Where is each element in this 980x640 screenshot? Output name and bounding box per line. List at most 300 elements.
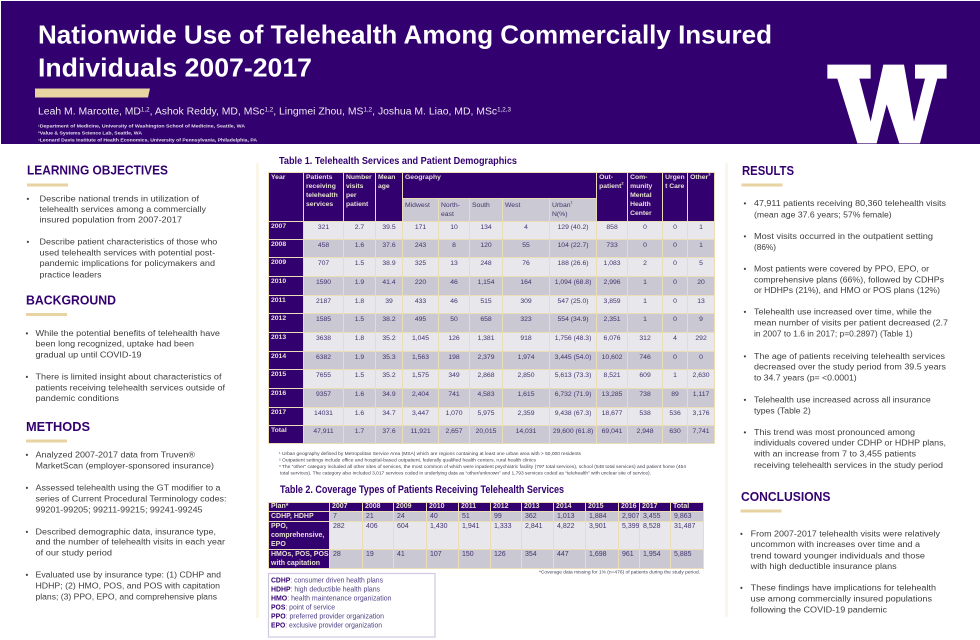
table 1: telehealth services and patient demographics: munity [630, 183, 652, 190]
table 1: telehealth services and patient demographics: 746 [639, 354, 651, 361]
abbreviation legend: HDHP: high deductible health plans [271, 584, 380, 594]
table 1: telehealth services and patient demographics: 41.4 [382, 279, 396, 286]
authors: , Ashok Reddy, MD, MSc [150, 106, 265, 118]
table 1: telehealth services and patient demographics: 2 [643, 260, 647, 267]
table 1: telehealth services and patient demographics: 1,575 [412, 372, 429, 379]
table 2: coverage types of patients: 362 [525, 513, 537, 520]
abbreviation legend: HMO: health maintenance organization [271, 594, 392, 602]
objectives list: • [26, 194, 30, 204]
results list: (mean age 37.6 years; 57% female) [754, 210, 892, 220]
table 1: telehealth services and patient demographics: 38.9 [382, 260, 396, 267]
table 1: telehealth services and patient demographics: 0 [673, 224, 677, 231]
methods list: • [26, 484, 28, 492]
table 2: coverage types of patients: 1,333 [494, 523, 512, 530]
abbreviation legend: POS: point of service [271, 602, 335, 612]
table 1 footnotes: ² Outpatient settings include office and hospital-based outpatient, federally qualified health centers, rural health clinics [279, 458, 536, 462]
table 1: telehealth services and patient demographics: 515 [480, 298, 492, 305]
table 2: coverage types of patients: 604 [397, 523, 409, 530]
table 1: telehealth services and patient demographics: 741 [448, 391, 460, 398]
background list: While the potential benefits of telehealth have [36, 329, 221, 338]
table 1: telehealth services and patient demographics: 3638 [316, 335, 331, 342]
table 1: telehealth services and patient demographics: age [378, 183, 390, 190]
table 2 footnote: *Coverage data missing for 1% (n=476) of patients during the study period. [539, 570, 700, 574]
table 1: telehealth services and patient demographics: 126 [448, 335, 460, 342]
table 2: coverage types of patients: HMOs, POS, POS with capitation [271, 551, 329, 567]
table 2: coverage types of patients: 2017 [642, 503, 658, 510]
table 1: telehealth services and patient demographics: 9 [699, 316, 703, 323]
table 2: coverage types of patients: 2011 [461, 503, 476, 510]
table 1: telehealth services and patient demographics: 554 (34.9) [558, 316, 589, 323]
table 1: telehealth services and patient demographics: 76 [522, 260, 530, 267]
table 1: telehealth services and patient demographics: 547 (25.0) [558, 298, 589, 305]
table 1: telehealth services and patient demographics: 39 [385, 298, 393, 305]
table 2: coverage types of patients: 2010 [429, 503, 445, 510]
table 1: telehealth services and patient demographics: 536 [669, 410, 681, 417]
results list: comprehensive plans (66%), followed by CDHPs [754, 276, 944, 284]
conclusions list: use among commercially insured populations [751, 594, 932, 604]
abbreviation legend [268, 574, 435, 637]
table 1: telehealth services and patient demographics: 89 [671, 391, 679, 398]
table 1: telehealth services and patient demographics: 738 [639, 391, 651, 398]
table 2: coverage types of patients: 1,954 [643, 551, 661, 558]
table 1: telehealth services and patient demographics: 1,381 [477, 335, 494, 342]
heading: table 2: Table 2. Coverage Types of Patients Receiving Telehealth Services [280, 484, 564, 496]
table 1: telehealth services and patient demographics: Year [271, 174, 285, 181]
results list: decreased over the study period from 39.5 years [754, 362, 946, 372]
table 1: telehealth services and patient demographics: 0 [673, 298, 677, 305]
table 1: telehealth services and patient demographics: 2.7 [355, 224, 364, 231]
table 1: telehealth services and patient demographics: 9,438 (67.3) [555, 410, 591, 417]
table 2: coverage types of patients: 2013 [524, 503, 540, 510]
table 1: telehealth services and patient demographics: 1.6 [355, 242, 364, 249]
table 1: telehealth services and patient demographics: 7,741 [693, 428, 710, 435]
table 1: telehealth services and patient demographics: Geography [405, 174, 441, 181]
table 1: telehealth services and patient demographics: 1,070 [445, 410, 462, 417]
table 2: coverage types of patients: 2008 [365, 503, 381, 510]
results list: individuals covered under CDHP or HDHP plans, [754, 438, 946, 448]
table 1: telehealth services and patient demographics: 2,404 [412, 391, 429, 398]
table 1: telehealth services and patient demographics: 20,015 [476, 428, 496, 435]
objectives list: telehealth services among a commercially [40, 205, 206, 214]
table 2: coverage types of patients: 406 [366, 523, 378, 530]
table 1: telehealth services and patient demographics: 0 [673, 316, 677, 323]
table 2: coverage types of patients: 28 [333, 551, 341, 558]
table 1: telehealth services and patient demographics: 3,447 [412, 410, 429, 417]
results list: mean number of visits per patient decreased (2.7 [754, 318, 949, 328]
table 1: telehealth services and patient demographics: 4 [524, 224, 528, 231]
results list: The age of patients receiving telehealth services [754, 352, 945, 361]
table 1: telehealth services and patient demographics: 1.5 [355, 316, 364, 323]
objectives list: practice leaders [40, 270, 102, 280]
methods list: Assessed telehealth using the GT modifier to a [36, 484, 221, 492]
table 1: telehealth services and patient demographics: 243 [415, 242, 426, 249]
table 2: coverage types of patients: CDHP, HDHP [271, 513, 314, 520]
table 1: telehealth services and patient demographics: 220 [415, 279, 426, 286]
table 2: coverage types of patients: Plan* [271, 503, 289, 510]
table 1: telehealth services and patient demographics: Health [630, 201, 651, 208]
methods list: • [26, 570, 28, 580]
table 1: telehealth services and patient demographics: North- [441, 202, 460, 209]
table 2: coverage types of patients: 1,013 [557, 513, 575, 520]
table 1: telehealth services and patient demographics: 1.9 [355, 279, 364, 286]
panel: learning objectives [26, 164, 218, 280]
table 1: telehealth services and patient demographics: Out- [599, 174, 613, 181]
table 1: telehealth services and patient demographics: South [472, 202, 490, 209]
table 1: telehealth services and patient demographics: 7655 [316, 372, 331, 379]
table 1: telehealth services and patient demographics: 6,732 (71.9) [555, 391, 591, 398]
table 2: coverage types of patients: 447 [557, 551, 569, 558]
table 2: coverage types of patients: PPO, comprehensive, EPO [271, 523, 324, 548]
table 2: coverage types of patients: 107 [430, 551, 442, 558]
table 1: telehealth services and patient demographics: 538 [639, 410, 651, 417]
table 1: telehealth services and patient demographics: 34.7 [382, 410, 396, 417]
table 1: telehealth services and patient demographics: receiving [306, 183, 336, 190]
table 1: telehealth services and patient demographics: 6,076 [604, 335, 621, 342]
table 1: telehealth services and patient demographics: 321 [318, 224, 329, 231]
table 1: telehealth services and patient demographics: 2,359 [517, 410, 534, 417]
table 2: coverage types of patients: 40 [430, 513, 438, 520]
methods list: of our study period [36, 548, 112, 558]
table 2: coverage types of patients: 51 [462, 513, 470, 520]
table 1: telehealth services and patient demographics: 55 [522, 242, 530, 249]
table 1: telehealth services and patient demographics: 18,677 [602, 410, 622, 417]
table 1: telehealth services and patient demographics: 1.6 [355, 391, 364, 398]
table 1: telehealth services and patient demographics: 2015 [271, 371, 286, 378]
table 1 footnotes: ³ The “other” category included all other sites of services, the most common of which were inpatient psychiatric facility (797 total services), school (548 total services) and patient home (454 [279, 464, 687, 469]
conclusions list [740, 530, 940, 614]
table 1: telehealth services and patient demographics: 10 [450, 224, 458, 231]
table 1: telehealth services and patient demographics: Urban1 [552, 200, 573, 209]
objectives list: Describe national trends in utilization of [40, 194, 200, 204]
table 1: telehealth services and patient demographics: Com- [630, 174, 647, 181]
table 1: telehealth services and patient demographics: Mean [378, 174, 395, 181]
conclusions list: These findings have implications for telehealth [751, 584, 936, 592]
table 1: telehealth services and patient demographics: 35.2 [382, 372, 396, 379]
table 1: telehealth services and patient demographics: 1,117 [693, 391, 709, 398]
results list: • [744, 264, 746, 274]
abbreviation legend: PPO: preferred provider organization [271, 612, 384, 620]
results list: or HDHPs (21%), and HMO or POS plans (12%) [754, 286, 940, 295]
table 1: telehealth services and patient demographics: 11,921 [410, 428, 431, 435]
table 1: telehealth services and patient demographics: 733 [606, 242, 618, 249]
table 1: telehealth services and patient demographics: patient2 [599, 181, 624, 190]
table 1: telehealth services and patient demographics: 4 [673, 335, 677, 342]
table 1: telehealth services and patient demographics: 0 [673, 260, 677, 267]
table 1: telehealth services and patient demographics: 14031 [314, 410, 333, 417]
table 1: telehealth services and patient demographics: 6382 [316, 354, 331, 361]
table 1: telehealth services and patient demographics: 3,176 [693, 410, 710, 417]
conclusions list: trend toward younger individuals and those [751, 552, 926, 560]
table 1: telehealth services and patient demographics: visits [346, 183, 363, 190]
table 1: telehealth services and patient demographics: 323 [520, 316, 532, 323]
results list: (86%) [754, 243, 776, 252]
table 2: coverage types of patients: 99 [494, 513, 502, 520]
table 1: telehealth services and patient demographics: 198 [448, 354, 460, 361]
results list: in 2007 to 1.6 in 2017; p=0.2897) (Table 1) [754, 330, 913, 338]
results list: • [744, 428, 746, 437]
table 2: coverage types of patients: 2,907 [622, 513, 640, 520]
table 1: telehealth services and patient demographics: 325 [415, 260, 426, 267]
table 1: telehealth services and patient demographics: 3,859 [604, 298, 621, 305]
table 1: telehealth services and patient demographics: 1,756 (48.3) [555, 335, 591, 342]
results list: Telehealth use increased across all insurance [754, 396, 931, 404]
conclusions list: • [740, 530, 743, 538]
table 1: telehealth services and patient demographics: West [505, 202, 520, 209]
table 1: telehealth services and patient demographics: 2016 [271, 390, 286, 397]
table 1: telehealth services and patient demographics: telehealth [306, 192, 338, 199]
table 1: telehealth services and patient demographics: t Care [665, 183, 684, 190]
heading: conclusions: CONCLUSIONS [741, 490, 830, 504]
methods list: MarketScan (employer-sponsored insurance) [36, 462, 214, 470]
table 1: telehealth services and patient demographics: 858 [606, 224, 618, 231]
table 1: telehealth services and patient demographics: 69,041 [602, 428, 622, 435]
heading: methods: METHODS [26, 420, 90, 434]
table 1: telehealth services and patient demographics: 0 [699, 354, 703, 361]
table 1: telehealth services and patient demographics: 2,630 [693, 372, 710, 379]
authors: , Joshua M. Liao, MD, MSc [372, 106, 497, 118]
methods list: Described demographic data, insurance type, [36, 528, 216, 536]
methods list: plans; (3) PPO, EPO, and comprehensive plans [36, 592, 217, 602]
table 1: telehealth services and patient demographics: 0 [673, 354, 677, 361]
table 1: telehealth services and patient demographics: 120 [480, 242, 492, 249]
table 1: telehealth services and patient demographics: 5,613 (73.3) [555, 372, 591, 379]
table 2: coverage types of patients: 126 [494, 551, 506, 558]
table 2: coverage types of patients: 150 [462, 551, 474, 558]
table 2: coverage types of patients: 2015 [588, 503, 604, 510]
results list: • [744, 308, 746, 316]
table 1: telehealth services and patient demographics: 29,600 (61.8) [553, 428, 593, 435]
table 1: telehealth services and patient demographics: 458 [318, 242, 329, 249]
table 1: telehealth services and patient demographics: 37.6 [382, 242, 396, 249]
authors: Leah M. Marcotte, MD [38, 106, 137, 118]
table 1: telehealth services and patient demographics: 1,083 [604, 260, 621, 267]
table 1: telehealth services and patient demographics: 630 [669, 428, 681, 435]
background list [26, 329, 226, 403]
table 1: telehealth services and patient demographics: 918 [520, 335, 532, 342]
results list: Most visits occurred in the outpatient setting [754, 232, 933, 241]
table 1: telehealth services and patient demographics: 433 [415, 298, 426, 305]
table 1: telehealth services and patient demographics: 35.3 [382, 354, 396, 361]
table 2: coverage types of patients: 7 [333, 513, 337, 520]
table 1: telehealth services and patient demographics: 1,563 [412, 354, 429, 361]
objectives list: • [26, 238, 30, 246]
table 1: telehealth services and patient demographics: N(%) [552, 211, 567, 218]
background list: gradual up until COVID-19 [36, 350, 142, 360]
table 2: coverage types of patients: 2,841 [525, 523, 543, 530]
conclusions list: From 2007-2017 telehealth visits were relatively [751, 530, 940, 538]
table 2: coverage types of patients: 2016 [621, 503, 637, 510]
title [38, 20, 772, 82]
table 1: telehealth services and patient demographics: 1.8 [355, 335, 364, 342]
results list: 47,911 patients receiving 80,360 telehealth visits [754, 199, 946, 208]
affiliations: ³Leonard Davis Institute of Health Economics, University of Pennsylvania, Philadelphia, PA [38, 138, 257, 142]
panel: results [742, 164, 949, 470]
table 1: telehealth services and patient demographics: 20 [697, 279, 705, 286]
table 1: telehealth services and patient demographics: 1.7 [355, 428, 364, 435]
table 1: telehealth services and patient demographics: 39.5 [382, 224, 396, 231]
table 1: telehealth services and patient demographics: 8,521 [604, 372, 621, 379]
table 1: telehealth services and patient demographics: 2007 [271, 223, 286, 230]
gold accent bar [35, 88, 150, 98]
table 1: telehealth services and patient demographics: 707 [318, 260, 329, 267]
table 1: telehealth services and patient demographics: 164 [520, 279, 532, 286]
table 1: telehealth services and patient demographics: 1,094 (68.8) [555, 279, 591, 286]
heading: background: BACKGROUND [26, 294, 116, 308]
table 1: telehealth services and patient demographics: 292 [695, 335, 707, 342]
table 1: telehealth services and patient demographics: 1,615 [517, 391, 534, 398]
conclusions list: following the COVID-19 pandemic [751, 606, 887, 614]
panel: background [26, 294, 226, 403]
results list: with an increase from 7 to 3,455 patients [753, 450, 916, 458]
table 2: coverage types of patients: 8,528 [643, 523, 661, 530]
table 1: telehealth services and patient demographics: 2,996 [604, 279, 621, 286]
table 1: telehealth services and patient demographics: 8 [452, 242, 456, 249]
results list: • [744, 396, 746, 404]
table 1: telehealth services and patient demographics: Urgen [665, 174, 685, 181]
table 1: telehealth services and patient demographics: 1 [699, 224, 703, 231]
affiliations [38, 124, 257, 142]
table 2: coverage types of patients: 2014 [556, 503, 572, 510]
table 1 footnotes: total services). The category also included 3,017 services coded in underlying data as “other/unknown” and 1,793 services coded as “telehealth” with unclear site of service). [280, 470, 651, 476]
authors: , Lingmei Zhou, MS [273, 106, 364, 118]
authors: 1,2 [141, 108, 150, 114]
results list: This trend was most pronounced among [754, 428, 915, 437]
results list: • [744, 232, 746, 241]
table 1: telehealth services and patient demographics: 13 [450, 260, 458, 267]
abbreviation legend: EPO: exclusive provider organization [271, 620, 382, 630]
table 1: telehealth services and patient demographics: 2013 [271, 334, 286, 341]
table 1: telehealth services and patient demographics: 188 (26.6) [558, 260, 589, 267]
table 2: coverage types of patients: 2009 [396, 503, 412, 510]
results list: Most patients were covered by PPO, EPO, or [754, 264, 929, 274]
table 1: telehealth services and patient demographics: 2,657 [445, 428, 462, 435]
table 1: telehealth services and patient demographics: services [306, 201, 333, 208]
table 1: telehealth services and patient demographics: Midwest [405, 202, 430, 209]
table 1: telehealth services and patient demographics: 171 [415, 224, 426, 231]
table 2: coverage types of patients: 5,885 [674, 551, 692, 558]
table 1: telehealth services and patient demographics: 1 [643, 279, 647, 286]
table 2: coverage types of patients: 2012 [493, 503, 509, 510]
table 1: telehealth services and patient demographics: 1,045 [412, 335, 429, 342]
table 1: telehealth services and patient demographics: 2011 [271, 297, 286, 304]
table 1: telehealth services and patient demographics: patient [346, 201, 368, 208]
table 2: coverage types of patients: 1,698 [589, 551, 607, 558]
abbreviation legend: CDHP: consumer driven health plans [271, 576, 383, 584]
table 2: coverage types of patients: 9,863 [674, 513, 692, 520]
table 1: telehealth services and patient demographics: 1.6 [355, 410, 364, 417]
table 1: telehealth services and patient demographics: 0 [673, 242, 677, 249]
table 1: telehealth services and patient demographics: east [441, 211, 454, 218]
table 1: telehealth services and patient demographics: 658 [480, 316, 492, 323]
table 1: telehealth services and patient demographics: 2,379 [477, 354, 494, 361]
table 1: telehealth services and patient demographics: 2187 [316, 298, 331, 305]
table 1: telehealth services and patient demographics: 1 [643, 316, 647, 323]
table 1: telehealth services and patient demographics: 34.9 [382, 391, 396, 398]
results list: • [744, 352, 746, 361]
table 1: telehealth services and patient demographics [268, 172, 715, 444]
conclusions list: uncommon with increases over time and a [751, 540, 921, 549]
title: Nationwide Use of Telehealth Among Commercially Insured [38, 20, 772, 50]
table 1: telehealth services and patient demographics: Center [630, 210, 652, 217]
table 1: telehealth services and patient demographics: Total [271, 427, 287, 434]
results list: Telehealth use increased over time, while the [754, 308, 932, 316]
authors: 1,2 [265, 108, 274, 114]
panel: conclusions [740, 490, 940, 614]
table 1: telehealth services and patient demographics: 2008 [271, 241, 286, 248]
table 1: telehealth services and patient demographics: 46 [450, 298, 458, 305]
table 1: telehealth services and patient demographics: 46 [450, 279, 458, 286]
objectives list: used telehealth services with potential post- [40, 248, 215, 258]
table 1: telehealth services and patient demographics: 2,850 [517, 372, 534, 379]
objectives list: Describe patient characteristics of those who [40, 238, 218, 246]
table 2: coverage types of patients: 3,901 [589, 523, 607, 530]
table 1: telehealth services and patient demographics: 1.8 [355, 298, 364, 305]
background list: • [26, 372, 28, 382]
objectives list: pandemic implications for policymakers and [40, 259, 215, 268]
methods list: Analyzed 2007-2017 data from Truven® [36, 450, 195, 460]
table 2: coverage types of patients: 354 [525, 551, 537, 558]
table 1: telehealth services and patient demographics: 1 [699, 242, 703, 249]
table 1: telehealth services and patient demographics: Number [346, 174, 372, 181]
table 1: telehealth services and patient demographics: 2017 [271, 409, 286, 416]
table 1: telehealth services and patient demographics: 495 [415, 316, 426, 323]
table 1: telehealth services and patient demographics: 37.6 [382, 428, 396, 435]
title: Individuals 2007-2017 [38, 52, 312, 82]
table 1: telehealth services and patient demographics: 129 (40.2) [558, 224, 589, 231]
table 1: telehealth services and patient demographics: 1,974 [517, 354, 534, 361]
affiliations: ²Value & Systems Science Lab, Seattle, WA [38, 130, 142, 136]
conclusions list: with high deductible insurance plans [750, 562, 897, 571]
methods list: • [26, 528, 28, 536]
table 2: coverage types of patients [268, 502, 704, 569]
authors: 1,2,3 [497, 108, 512, 114]
icon: university W logo [827, 65, 947, 143]
table 1: telehealth services and patient demographics: 0 [643, 242, 647, 249]
table 1: telehealth services and patient demographics: Mental [630, 192, 652, 199]
table 1: telehealth services and patient demographics: 609 [639, 372, 651, 379]
table 1: telehealth services and patient demographics: 0 [643, 224, 647, 231]
methods list: Evaluated use by insurance type: (1) CDHP and [36, 570, 221, 580]
table 2: coverage types of patients: 21 [366, 513, 374, 520]
table 1: telehealth services and patient demographics: 2012 [271, 315, 286, 322]
table 2: coverage types of patients: 4,822 [557, 523, 575, 530]
table 1: telehealth services and patient demographics: 13,285 [602, 391, 622, 398]
methods list: • [26, 450, 28, 460]
table 1: telehealth services and patient demographics: per [346, 192, 357, 199]
authors: 1,2 [363, 108, 373, 114]
objectives list [26, 194, 218, 280]
results list [744, 199, 949, 470]
table 1: telehealth services and patient demographics: 104 (22.7) [558, 242, 589, 249]
table 2: coverage types of patients: 1,941 [462, 523, 480, 530]
background list: patients receiving telehealth services outside of [36, 384, 226, 392]
table 1: telehealth services and patient demographics: 47,911 [313, 428, 334, 435]
results list: to 34.7 years (p= <0.0001) [754, 374, 857, 382]
table 1: telehealth services and patient demographics: 2,868 [477, 372, 494, 379]
table 1 footnotes: ¹ Urban geography defined by Metropolitan Service Area (MSA) which are regions containing at least one urban area with > 50,000 residents [279, 451, 581, 456]
table 1: telehealth services and patient demographics: 309 [520, 298, 532, 305]
table 1: telehealth services and patient demographics: 349 [448, 372, 460, 379]
table 1: telehealth services and patient demographics: 2014 [271, 353, 286, 360]
table 1: telehealth services and patient demographics: 50 [450, 316, 458, 323]
table 1: telehealth services and patient demographics: 1 [643, 298, 647, 305]
background list: pandemic conditions [36, 394, 119, 403]
table 2: coverage types of patients: 24 [397, 513, 405, 520]
methods list: series of Current Procedural Terminology codes: [36, 494, 226, 504]
objectives list: insured population from 2007-2017 [40, 216, 183, 224]
table 1: telehealth services and patient demographics: 248 [480, 260, 492, 267]
table 2: coverage types of patients: Total [673, 503, 689, 510]
